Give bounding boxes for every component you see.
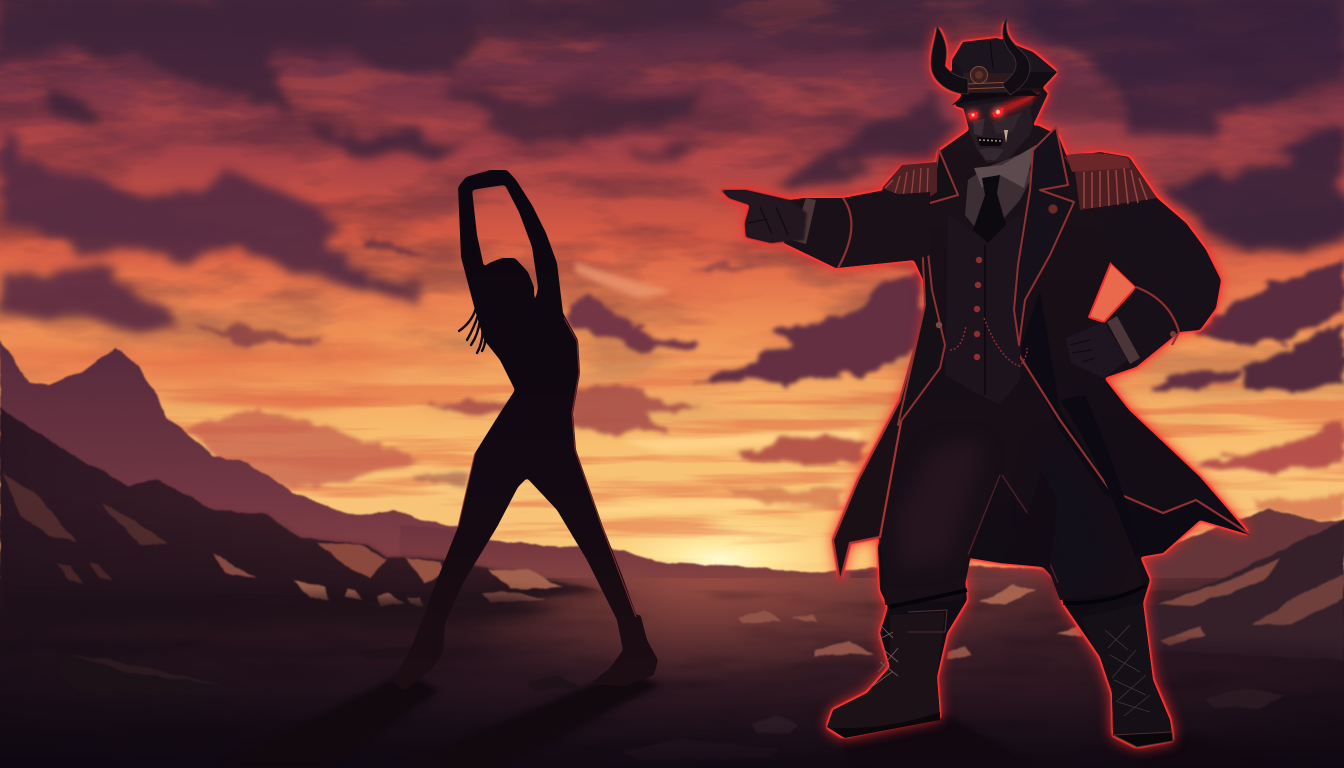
boots: [827, 603, 1173, 747]
left peak: [0, 340, 480, 600]
hair strands: [459, 308, 485, 353]
demon officer: [721, 15, 1250, 747]
coat skirts: [833, 290, 1250, 582]
glowing body silhouette: [721, 15, 1250, 747]
gap between arm and torso: [1089, 263, 1136, 322]
right hills: [850, 508, 1344, 610]
demon's shadow: [835, 715, 1040, 768]
upper dark clouds: [0, 0, 1344, 250]
waistcoat: [945, 215, 1027, 405]
shirt and tie: [965, 145, 1036, 243]
trousers: [880, 400, 1147, 607]
distant mountains: [0, 340, 1344, 610]
glowing red eyes: [968, 92, 1040, 119]
ridge base blending into ground: [0, 598, 560, 626]
bottom edge darkening: [0, 690, 1344, 768]
cap: [952, 38, 1057, 125]
ground: [0, 578, 1344, 768]
right ridge base blending into ground: [1145, 648, 1344, 668]
near left ridge: [0, 408, 600, 626]
foreground rocks and shadows: [0, 646, 1344, 768]
hip arm and fist: [1066, 200, 1219, 378]
mid clouds: [185, 240, 1344, 522]
right lapel: [1014, 127, 1074, 345]
near right ridge: [738, 520, 1344, 668]
central hills: [400, 525, 900, 600]
left epaulette: [882, 162, 937, 203]
left lapel: [898, 150, 958, 425]
body, coat, legs: [721, 125, 1250, 747]
military cap details: [952, 38, 1057, 105]
head and neck: [963, 100, 1033, 163]
oni mask face: [963, 93, 1048, 163]
horns foreground: [931, 15, 1030, 95]
horns: [931, 26, 968, 94]
woman's shadows: [215, 670, 660, 768]
right epaulette: [1064, 153, 1157, 210]
pointing arm: [721, 190, 930, 268]
clouds: [0, 0, 1344, 522]
rim light: [458, 318, 636, 617]
ground rocks: [57, 646, 1285, 760]
woman silhouette: [392, 170, 658, 690]
coat button: [1048, 204, 1058, 214]
ridge highlights: [3, 473, 562, 606]
